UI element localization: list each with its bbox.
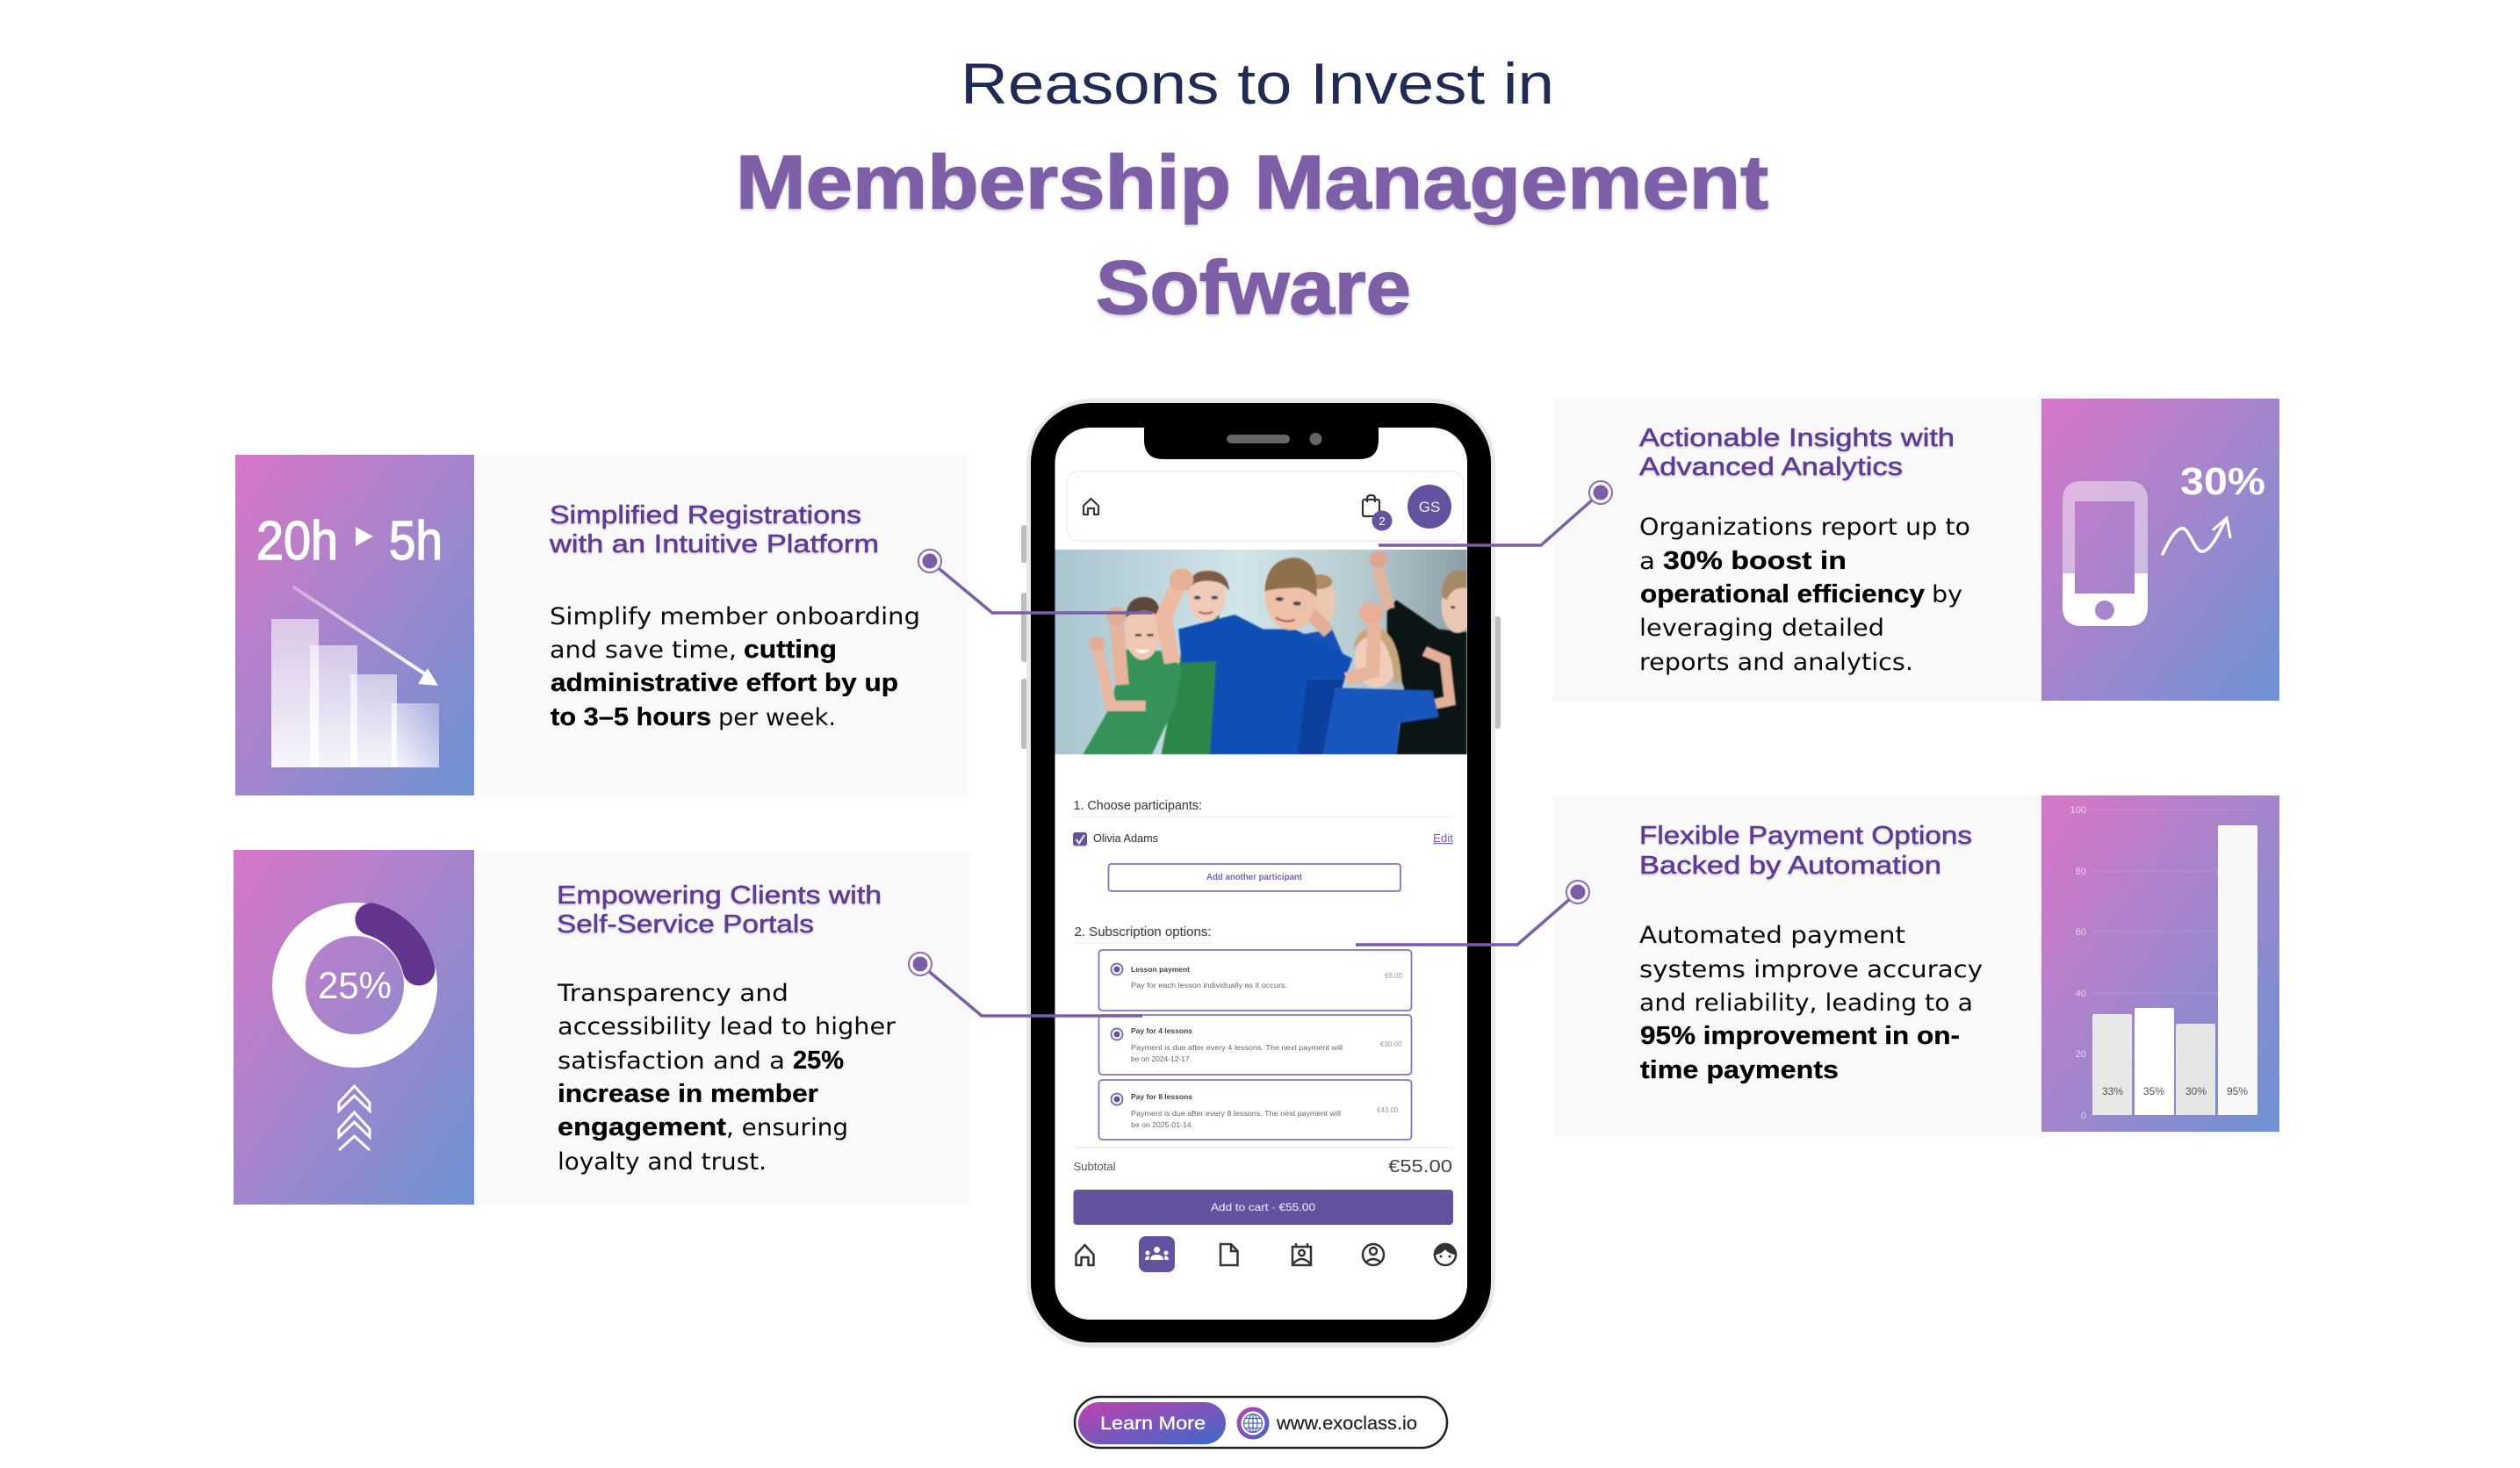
body text: reports and analytics.	[1639, 649, 1913, 676]
left girl in green	[1083, 597, 1182, 754]
body text: accessibility lead to higher	[558, 1013, 896, 1040]
body text: per week.	[718, 704, 836, 731]
body text: 95% improvement in on-	[1640, 1022, 1960, 1050]
heading: Self-Service Portals	[557, 910, 814, 939]
body text: Simplify member onboarding	[550, 603, 920, 630]
icon panel: 30% phone: 30%	[2180, 460, 2265, 503]
heading	[1639, 424, 1955, 481]
body text: increase in member	[558, 1080, 818, 1108]
phone mockup	[1021, 399, 1501, 1348]
call to action	[1075, 1397, 1447, 1448]
booking form: Subtotal	[1073, 1161, 1115, 1173]
body text: Automated payment	[1639, 922, 1905, 949]
panel: simplified registrations	[235, 455, 968, 795]
heading: Simplified Registrations	[550, 501, 861, 529]
body text: operational efficiency	[1640, 580, 1925, 608]
body text: leveraging detailed	[1639, 615, 1884, 642]
body text: and reliability, leading to a	[1639, 989, 1973, 1017]
add participant button	[1108, 864, 1400, 891]
bar chart: 20	[2076, 1049, 2086, 1060]
body text: 25%	[793, 1047, 844, 1075]
bar chart	[2041, 795, 2279, 1132]
heading: Actionable Insights with	[1639, 424, 1955, 452]
booking form: 2. Subscription options:	[1075, 925, 1212, 939]
bar chart: 40	[2076, 989, 2086, 999]
add to cart button: Add to cart · €55.00	[1211, 1201, 1315, 1213]
bar chart: 0	[2081, 1111, 2086, 1121]
body text: Organizations report up to	[1639, 514, 1970, 541]
option: pay for 8 lessons: €43.00	[1377, 1106, 1399, 1114]
option: pay for 8 lessons: Payment is due after every 8 lessons. The next payment will	[1131, 1110, 1341, 1118]
option: lesson payment	[1099, 950, 1412, 1011]
checkbox	[1073, 832, 1087, 846]
body text: cutting	[744, 636, 837, 664]
icon: globe	[1236, 1407, 1270, 1440]
app header	[1067, 471, 1464, 541]
title	[736, 51, 1768, 330]
option: pay for 8 lessons: be on 2025-01-14.	[1131, 1121, 1193, 1129]
heading	[549, 501, 879, 558]
body text: and save time,	[550, 637, 737, 664]
icon panel: 25% donut	[234, 850, 474, 1205]
title emphasis: Membership Management	[736, 140, 1768, 225]
notch	[1144, 421, 1379, 459]
option: pay for 4 lessons	[1099, 1015, 1412, 1075]
option: pay for 4 lessons: Pay for 4 lessons	[1131, 1026, 1192, 1035]
body text: engagement	[558, 1113, 726, 1141]
body text	[550, 603, 920, 731]
app header: 2	[1379, 515, 1386, 528]
bar chart: 33%	[2102, 1085, 2123, 1097]
centre boy in blue	[1163, 558, 1383, 754]
option: pay for 4 lessons: be on 2024-12-17.	[1131, 1055, 1192, 1063]
booking form: €55.00	[1388, 1157, 1452, 1177]
learn more button	[1078, 1402, 1226, 1444]
connector: payments to phone	[1356, 881, 1589, 945]
body text	[557, 980, 896, 1176]
back girl in blue	[1292, 574, 1344, 754]
heading: Empowering Clients with	[557, 882, 882, 910]
add participant button: Add another participant	[1206, 873, 1303, 882]
title line: reasons: Reasons to Invest in	[961, 51, 1554, 116]
body text: , ensuring	[726, 1114, 848, 1141]
option: pay for 8 lessons	[1099, 1080, 1412, 1140]
option: pay for 4 lessons: Payment is due after every 4 lessons. The next payment will	[1131, 1044, 1343, 1052]
icon panel: 25% donut: 25%	[318, 965, 392, 1007]
body text: systems improve accuracy	[1639, 956, 1983, 983]
bar chart: 35%	[2143, 1085, 2164, 1097]
body text: by	[1932, 581, 1962, 608]
body text	[1639, 514, 1970, 676]
option: lesson payment: Pay for each lesson individually as it occurs.	[1131, 982, 1287, 989]
booking form: Olivia Adams	[1093, 832, 1158, 845]
body text: a	[1639, 548, 1655, 575]
icon panel: 20h to 5h bars	[235, 455, 474, 795]
option: pay for 8 lessons: Pay for 8 lessons	[1131, 1092, 1192, 1101]
bottom navigation icons	[1076, 1236, 1456, 1272]
option: lesson payment: Lesson payment	[1131, 965, 1190, 974]
front girl in blue	[1322, 628, 1439, 754]
learn more button: Learn More	[1100, 1414, 1206, 1434]
heading	[557, 882, 882, 939]
panel: advanced analytics	[1553, 399, 2279, 701]
option: pay for 4 lessons: €30.00	[1380, 1040, 1402, 1048]
connector: analytics to phone	[1379, 481, 1612, 545]
booking form	[1073, 798, 1454, 1225]
body text: time payments	[1640, 1056, 1839, 1084]
option: lesson payment: €8.00	[1385, 972, 1403, 980]
icon panel: 20h to 5h bars: 5h	[389, 511, 443, 572]
bar chart: 30%	[2185, 1085, 2207, 1097]
body text	[1639, 922, 1983, 1084]
title emphasis	[736, 140, 1768, 330]
title emphasis: Sofware	[1096, 246, 1411, 330]
website url: www.exoclass.io	[1276, 1414, 1417, 1434]
back boy in black shirt	[1370, 551, 1474, 754]
back girl in green	[1161, 570, 1229, 754]
body text: loyalty and trust.	[558, 1148, 767, 1176]
heading: with an Intuitive Platform	[549, 530, 879, 558]
app header: GS	[1419, 499, 1440, 515]
heading	[1639, 822, 1972, 880]
connector: portals to phone	[909, 953, 1142, 1016]
panel: flexible payment options	[1553, 795, 2279, 1136]
booking form: Edit	[1433, 832, 1454, 845]
heading: Backed by Automation	[1639, 852, 1941, 880]
photo: children dancing	[1055, 550, 1474, 754]
body text: administrative effort by up	[551, 669, 898, 697]
bar chart: 60	[2076, 927, 2086, 938]
body text: satisfaction and a	[558, 1047, 785, 1075]
body text: 30% boost in	[1663, 547, 1847, 575]
icon panel: 20h to 5h bars: 20h	[256, 511, 338, 572]
add to cart button	[1073, 1190, 1453, 1225]
body text: Transparency and	[557, 980, 788, 1007]
bar chart: 80	[2076, 867, 2086, 877]
bar chart: 100	[2070, 805, 2086, 816]
panel: self-service portals	[234, 850, 970, 1205]
booking form: 1. Choose participants:	[1073, 798, 1202, 813]
side buttons	[1021, 525, 1501, 749]
icon panel: 30% phone	[2041, 399, 2279, 701]
bar chart: 95%	[2227, 1085, 2248, 1097]
body text: to 3–5 hours	[551, 703, 711, 731]
connector: registrations to phone	[918, 550, 1153, 613]
heading: Advanced Analytics	[1639, 453, 1903, 481]
heading: Flexible Payment Options	[1639, 822, 1972, 850]
